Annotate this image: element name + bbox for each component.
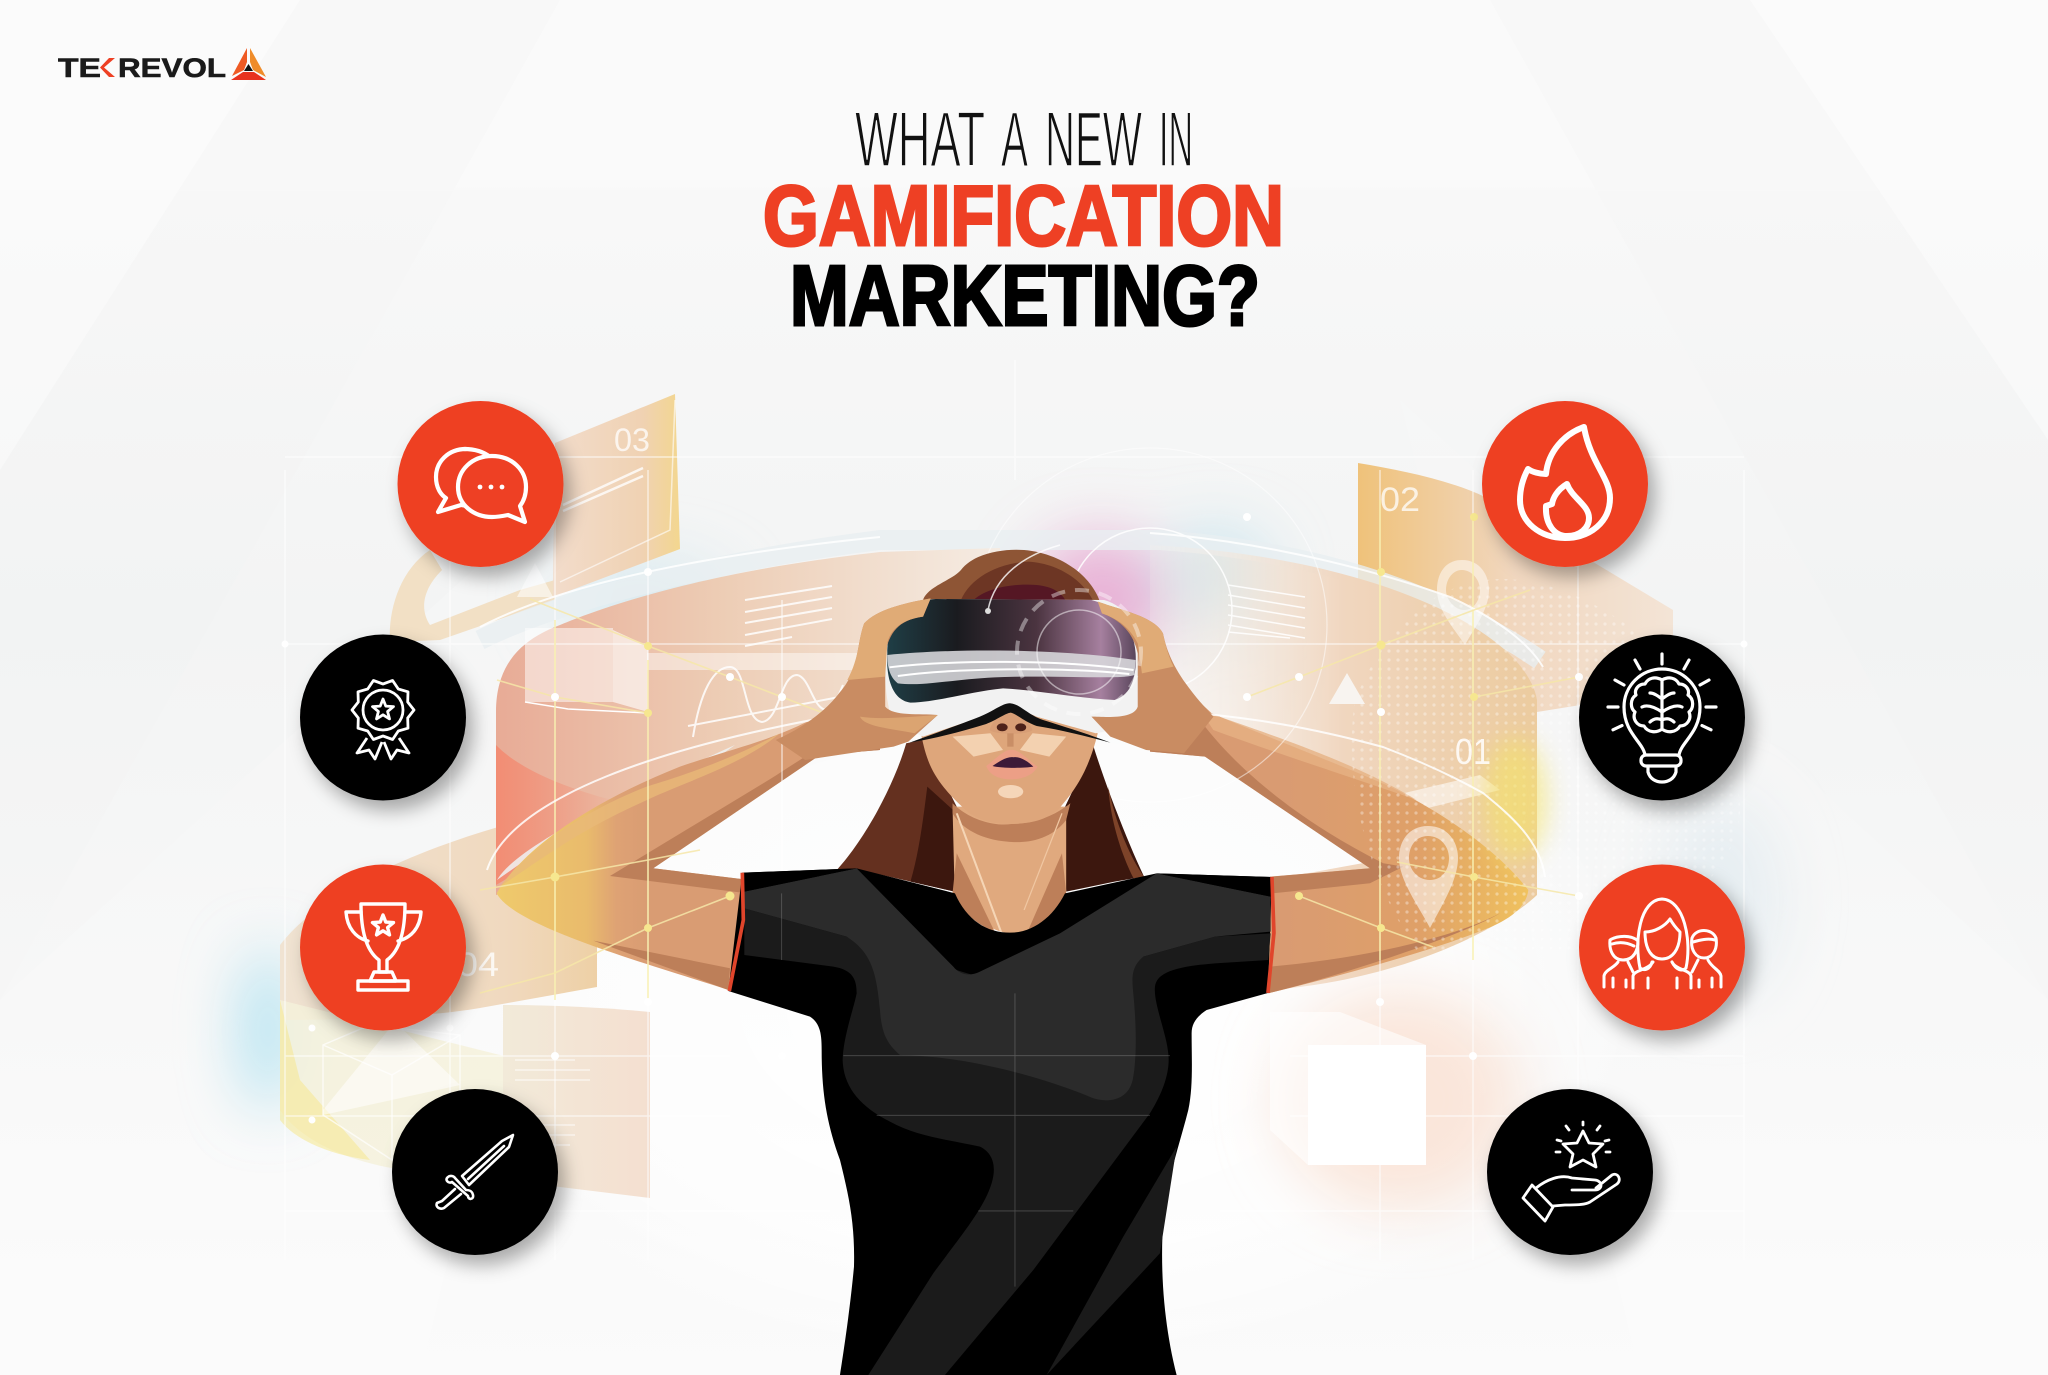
arm left [497, 677, 880, 990]
head and headset [776, 550, 1213, 824]
label 01: 01 [1455, 731, 1491, 772]
icon: hand with star [1487, 1089, 1653, 1255]
panel 04 [280, 803, 597, 1180]
icon: people [1579, 864, 1745, 1030]
triangle right [1329, 673, 1365, 704]
logo: TE [58, 53, 101, 83]
title line 1: A [1001, 95, 1028, 183]
shirt [728, 868, 1274, 1375]
logo [58, 48, 266, 83]
icon: fire [1482, 401, 1648, 567]
woman with VR headset [728, 545, 1274, 1375]
panel 02 [1358, 463, 1673, 712]
icon: chat bubbles [398, 401, 564, 567]
label 02: 02 [1380, 481, 1420, 519]
cube left [525, 628, 648, 713]
logo: REVOL [118, 53, 226, 83]
globe dots and map [1352, 579, 1713, 950]
icon: trophy [300, 864, 466, 1030]
lower left panel with cube [323, 1005, 650, 1198]
arm right [1150, 687, 1528, 993]
title line 3: MARKETING? [790, 249, 1260, 344]
title line 2: GAMIFICATION [763, 169, 1284, 264]
back band [480, 540, 1540, 990]
title: IN [1159, 95, 1193, 183]
label 04: 04 [457, 946, 499, 984]
panel 03 [390, 394, 680, 642]
hair back [837, 740, 1144, 892]
glow: blue and yellow left [242, 530, 1780, 1210]
white cube right [1270, 1012, 1426, 1165]
hud lines and grid [282, 360, 1748, 1260]
location pins [1399, 560, 1489, 928]
title line 1: WHAT [855, 95, 985, 183]
neck [953, 803, 1070, 933]
icon: medal [300, 634, 466, 800]
label 03: 03 [614, 422, 650, 458]
title line 1 [855, 95, 1193, 183]
yellow glow right [1483, 738, 1547, 862]
icon: brain bulb [1579, 634, 1745, 800]
title line 1: NEW [1045, 95, 1142, 183]
lens hud [985, 545, 1141, 714]
title [763, 95, 1284, 344]
icon: sword [392, 1089, 558, 1255]
